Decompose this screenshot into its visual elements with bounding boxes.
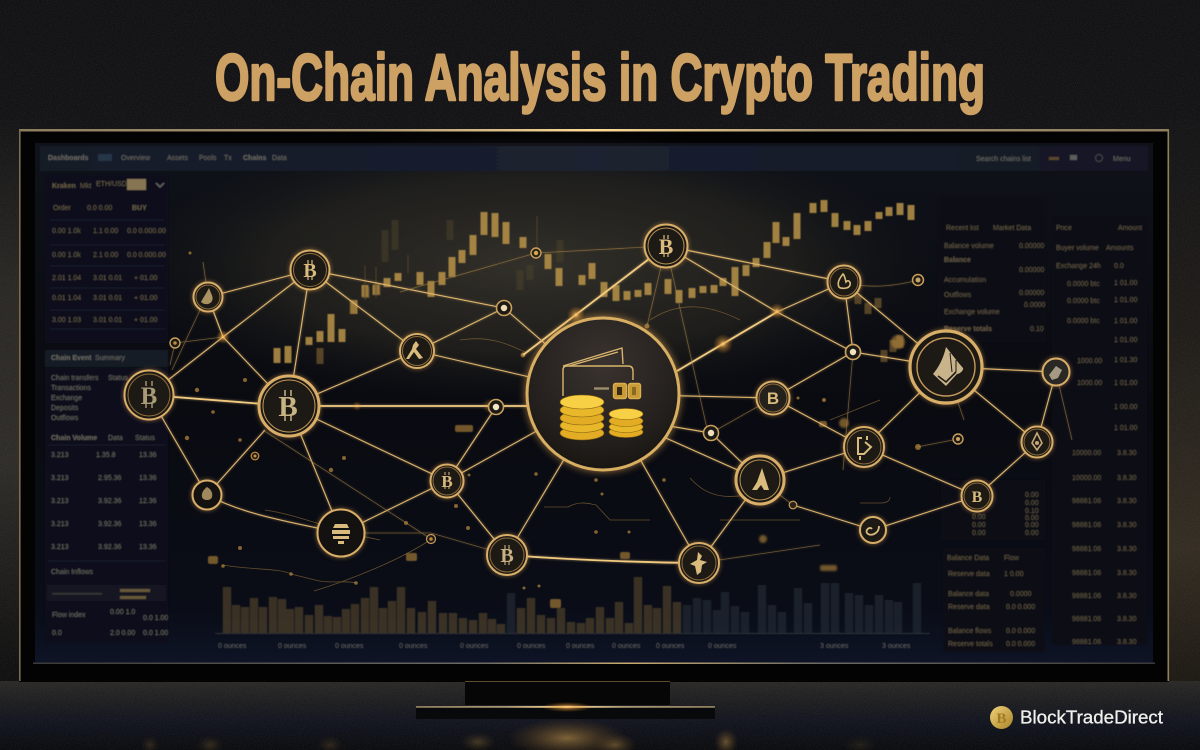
panel: right order tables: 0.00	[1025, 530, 1039, 537]
node: ledger icon	[318, 510, 364, 556]
panel: left trading table: Transactions	[51, 385, 91, 392]
icon: large coin stack	[560, 395, 604, 440]
panel: right order tables: Reserve totals	[944, 326, 992, 333]
panel: left trading table: 0.0 1.00	[143, 630, 168, 637]
icon: logo coin: B	[996, 711, 1007, 727]
panel: left trading table: 3.213	[51, 498, 69, 505]
panel: left trading table: 3.213	[51, 475, 69, 482]
chart: volume bars: 0 ounces	[335, 643, 364, 650]
panel: left trading table: 2.01 1.04	[52, 275, 81, 282]
panel: left trading table: Mkt	[80, 183, 91, 190]
panel: right order tables: 0.0 0.000	[1006, 604, 1035, 611]
node: ring under hub	[704, 426, 718, 440]
monitor stand	[416, 681, 715, 719]
glow highlights on lines	[216, 303, 785, 414]
panel: left trading table: + 01.00	[134, 317, 158, 324]
top navigation bar: Chains	[243, 155, 266, 162]
panel: right order tables: 0.0 0.000	[1006, 628, 1035, 635]
panel: right order tables: 3.8.30	[1117, 616, 1137, 623]
node: junction ring left	[170, 338, 180, 348]
panel: left trading table: 2.0 0.00	[110, 630, 135, 637]
network connection lines	[149, 246, 1072, 563]
panel: right order tables: 0.00	[972, 514, 986, 521]
panel: left trading table: 3.01 0.01	[93, 295, 122, 302]
panel: right order tables: 1 01.30	[1114, 357, 1137, 364]
panel: left trading table: 1.35.8	[96, 452, 116, 459]
panel: right order tables: Flow	[1004, 555, 1020, 562]
panel: right order tables: Balance volume	[944, 243, 994, 250]
panel: right order tables: 0.0000	[1010, 591, 1032, 598]
node: bitcoin small	[430, 464, 464, 498]
node: bitcoin left: B	[141, 383, 157, 410]
panel: right order tables: 1 01.00	[1114, 318, 1137, 325]
node: ring center right	[789, 501, 797, 509]
panel: left trading table: 13.36	[139, 475, 157, 482]
panel: right order tables: 3.8.30	[1117, 450, 1137, 457]
panel: right order tables: 0.00	[1025, 500, 1039, 507]
panel: right order tables: Amounts	[1106, 245, 1134, 252]
panel: right order tables: 0.00	[972, 506, 986, 513]
monitor bezel	[19, 130, 1169, 682]
panel: right order tables: 0.00	[972, 492, 986, 499]
top navigation bar: Data	[272, 155, 287, 162]
panel: right order tables	[938, 197, 1147, 652]
icon: wallet	[563, 348, 640, 398]
panel: left trading table: 0.00 1.0k	[52, 252, 81, 259]
top navigation bar	[40, 146, 1148, 171]
chart: candlesticks	[277, 200, 911, 364]
node: triangle glyph	[736, 456, 784, 504]
floor reflections	[140, 718, 878, 750]
chart: volume bars: 3 ounces	[882, 643, 911, 650]
panel: right order tables: 3.8.30	[1117, 593, 1137, 600]
node: drop icon	[194, 282, 222, 312]
panel: right order tables: Outflows	[944, 292, 972, 299]
panel: right order tables: Exchange 24h	[1056, 263, 1101, 270]
node: figure icon	[400, 334, 434, 368]
panel: left trading table: ETH/USD	[96, 181, 127, 188]
panel: right order tables: 0.10	[1030, 326, 1044, 333]
panel: left trading table: 0.00 1.0k	[52, 228, 81, 235]
panel: right order tables: 3.8.30	[1117, 498, 1137, 505]
panel: right order tables: 0.0000 btc	[1067, 281, 1100, 288]
panel: left trading table: + 01.00	[134, 275, 158, 282]
panel: right order tables: Recent list	[946, 225, 979, 232]
panel: left trading table: 0.0 0.00	[87, 205, 112, 212]
panel: right order tables: Balance	[944, 257, 971, 264]
node: bitcoin right: B	[972, 489, 983, 506]
panel: left trading table: 0.00 1.0	[110, 609, 135, 616]
panel: right order tables: 0.00	[972, 530, 986, 537]
panel: right order tables: 0.00	[1025, 492, 1039, 499]
panel: right order tables: Exchange volume	[944, 309, 1000, 316]
chart: volume bars: 0 ounces	[218, 643, 247, 650]
panel: left trading table: 3.00 1.03	[52, 317, 81, 324]
panel: left trading table: Exchange	[51, 395, 82, 402]
panel: right order tables: 1 01.00	[1114, 280, 1137, 287]
panel: right order tables: 0.00	[972, 522, 986, 529]
panel: right order tables: 98881.06	[1072, 593, 1101, 600]
node: flame top right	[828, 266, 860, 298]
chart: volume bars: 0 ounces	[656, 643, 685, 650]
panel: right order tables: 10000.00	[1072, 450, 1101, 457]
panel: left trading table: 3.01 0.01	[93, 275, 122, 282]
panel: left trading table: 3.213	[51, 521, 69, 528]
panel: right order tables: 3.8.30	[1117, 522, 1137, 529]
panel: left trading table: Summary	[95, 355, 125, 362]
node: wing icon	[910, 331, 982, 403]
chart: volume bars	[215, 577, 930, 650]
chart: volume bars: 0 ounces	[517, 643, 546, 650]
panel: right order tables: 0.00000	[1019, 243, 1044, 250]
node: ring lower right	[953, 434, 963, 444]
panel: left trading table: 0.0 0.000.00	[127, 228, 166, 235]
panel: right order tables: 3.8.30	[1117, 475, 1137, 482]
top navigation bar: Search chains list	[976, 156, 1031, 163]
node: bitcoin top center	[644, 224, 688, 268]
panel: left trading table: 3.92.36	[98, 521, 121, 528]
node: curl glyph	[860, 517, 886, 543]
node: bitcoin-style small	[756, 382, 790, 414]
panel: right order tables: 0.00000	[1019, 267, 1044, 274]
top navigation bar: Pools	[199, 155, 217, 162]
screen	[35, 143, 1153, 663]
panel: left trading table: Data	[108, 435, 123, 442]
panel: left trading table: 0.0 1.00	[143, 615, 168, 622]
panel: left trading table: Status	[108, 375, 128, 382]
panel: left trading table: Deposits	[51, 405, 79, 412]
node: ring top	[496, 300, 512, 316]
panel: left trading table	[45, 175, 168, 643]
panel: right order tables: 0.00000	[1019, 290, 1044, 297]
panel: right order tables: 98881.06	[1072, 570, 1101, 577]
chart: volume bars: 0 ounces	[278, 643, 307, 650]
panel: left trading table: 13.36	[139, 452, 157, 459]
panel: right order tables: 98881.06	[1072, 639, 1101, 646]
panel: right order tables: 1000.00	[1077, 358, 1102, 365]
panel: left trading table: 3.213	[51, 452, 69, 459]
node: bitcoin right	[962, 480, 992, 512]
top navigation bar: Assets	[167, 155, 189, 162]
node: bitcoin small: B	[441, 472, 453, 491]
screen haze behind chart	[130, 130, 930, 400]
chart: volume bars: 0 ounces	[566, 643, 595, 650]
panel: right order tables: Accumulation	[944, 277, 986, 284]
panel: right order tables: Balance data	[948, 591, 989, 598]
panel: left trading table: 1.1 0.00	[93, 228, 118, 235]
top navigation bar: Overview	[121, 155, 151, 162]
panel: right order tables: 1 00.00	[1114, 404, 1137, 411]
node: grey icon	[1042, 358, 1070, 386]
panel: right order tables: Reserve totals	[948, 641, 993, 648]
chart: volume bars: 3 ounces	[820, 643, 849, 650]
panel: monitor	[19, 129, 1169, 682]
panel: right order tables: 3.8.30	[1117, 570, 1137, 577]
panel: right order tables: 0.10	[1025, 508, 1039, 515]
panel: left trading table: 0.0 0.000.00	[127, 252, 166, 259]
panel: right order tables: Amount	[1118, 225, 1142, 232]
panel: right order tables: Market Data	[993, 225, 1031, 232]
node: bitcoin bottom: B	[500, 545, 514, 567]
panel: right order tables: 98881.06	[1072, 546, 1101, 553]
chart: volume bars: 0 ounces	[399, 643, 428, 650]
panel: left trading table: BUY	[132, 205, 147, 212]
icon: logo coin	[990, 706, 1013, 729]
node: bitcoin top center: B	[659, 234, 674, 259]
node: ring middle	[488, 400, 504, 414]
node: dollar glyph	[844, 427, 884, 467]
panel: left trading table: Outflows	[51, 415, 79, 422]
panel: right order tables: Balance flows	[948, 628, 992, 635]
panel: right order tables: Price	[1056, 225, 1072, 232]
decorative particles and faint trend lines	[185, 252, 921, 608]
panel: right order tables: 0.0000	[1024, 302, 1046, 309]
node: coin glyph bottom	[679, 543, 719, 583]
node: small ring bottom	[426, 534, 436, 544]
node: bitcoin top left	[290, 250, 330, 290]
panel: right order tables: 1000.00	[1077, 380, 1102, 387]
top navigation bar: Dashboards	[48, 155, 89, 162]
panel: right order tables: 98881.06	[1072, 498, 1101, 505]
chart: volume bars: 0 ounces	[708, 643, 737, 650]
panel: right order tables: 1 01.00	[1114, 380, 1137, 387]
panel: right order tables: 98881.06	[1072, 616, 1101, 623]
panel: left trading table: 12.36	[139, 498, 157, 505]
panel: left trading table: Chain transfers	[51, 375, 99, 382]
panel: left trading table: 13.36	[139, 521, 157, 528]
node: bitcoin bottom	[487, 535, 527, 575]
panel: right order tables: 1 01.00	[1114, 337, 1137, 344]
panel: left trading table: Status	[135, 435, 155, 442]
node: flame left	[192, 480, 222, 510]
node: central wallet with coins	[527, 318, 679, 470]
panel: right order tables: 1 0.00	[1004, 571, 1024, 578]
panel: right order tables: 3.8.30	[1117, 639, 1137, 646]
panel: left trading table: + 01.00	[134, 295, 158, 302]
panel: right order tables: Balance Data	[947, 555, 989, 562]
screen bottom edge	[33, 662, 1155, 664]
panel: right order tables: 0.0	[1114, 263, 1124, 270]
panel: right order tables: Buyer volume	[1056, 245, 1099, 252]
panel: left trading table: 3.01 0.01	[93, 317, 122, 324]
node: ring near wing	[846, 344, 860, 360]
chart: volume bars: 0 ounces	[460, 643, 489, 650]
icon: small coin stack	[609, 408, 643, 438]
panel: left trading table: 13.36	[139, 544, 157, 551]
panel: left trading table: Chain Event	[51, 355, 92, 362]
node: ring right small	[912, 274, 924, 286]
panel: right order tables: 0.0 0.000	[1006, 641, 1035, 648]
panel: right order tables: 10000.00	[1072, 475, 1101, 482]
node: bitcoin top left: B	[303, 260, 317, 282]
panel: right order tables: 98881.06	[1072, 522, 1101, 529]
panel: left trading table: 3.213	[51, 544, 69, 551]
panel: left trading table: 0.0	[52, 630, 62, 637]
chart: volume bars: 0 ounces	[612, 643, 641, 650]
panel: left trading table: 3.92.36	[98, 544, 121, 551]
top navigation bar: Menu	[1113, 156, 1131, 163]
monitor gold trim	[19, 129, 1169, 681]
panel: right order tables: 0.00	[1025, 515, 1039, 522]
panel: left trading table: Chain Volume	[51, 435, 97, 442]
panel: left trading table: 2.95.36	[98, 475, 121, 482]
panel: right order tables: 1 01.00	[1114, 297, 1137, 304]
panel: right order tables: 1 01.00	[1114, 425, 1137, 432]
node: ring chart top	[531, 248, 541, 258]
node: large bitcoin	[259, 376, 319, 436]
panel: right order tables: Reserve data	[948, 571, 990, 578]
panel: right order tables: 0.00	[1025, 522, 1039, 529]
panel: right order tables: 0.0000 btc	[1067, 298, 1100, 305]
panel: left trading table: Kraken	[52, 183, 76, 190]
node: small ring lower left	[251, 452, 259, 460]
panel: left trading table: 0.01 1.04	[52, 295, 81, 302]
top navigation bar: Tx	[224, 155, 232, 162]
panel: left trading table: Chain Inflows	[51, 569, 94, 576]
panel: right order tables: 3.8.30	[1117, 546, 1137, 553]
logo: BlockTradeDirect	[990, 706, 1163, 729]
panel: right order tables: 0.0000 btc	[1067, 318, 1100, 325]
panel: left trading table: 2.1 0.00	[93, 252, 118, 259]
node: flame right	[1022, 426, 1052, 458]
panel: right order tables: Reserve data	[948, 604, 990, 611]
logo wordmark: BlockTradeDirect	[1020, 708, 1163, 728]
panel: left trading table: Flow index	[52, 612, 86, 619]
panel: left trading table: 3.92.36	[98, 498, 121, 505]
node: bitcoin left	[124, 370, 174, 420]
panel: left trading table: Order	[53, 205, 72, 212]
node: bitcoin-style small: B	[767, 389, 779, 408]
node: large bitcoin: B	[278, 391, 298, 423]
